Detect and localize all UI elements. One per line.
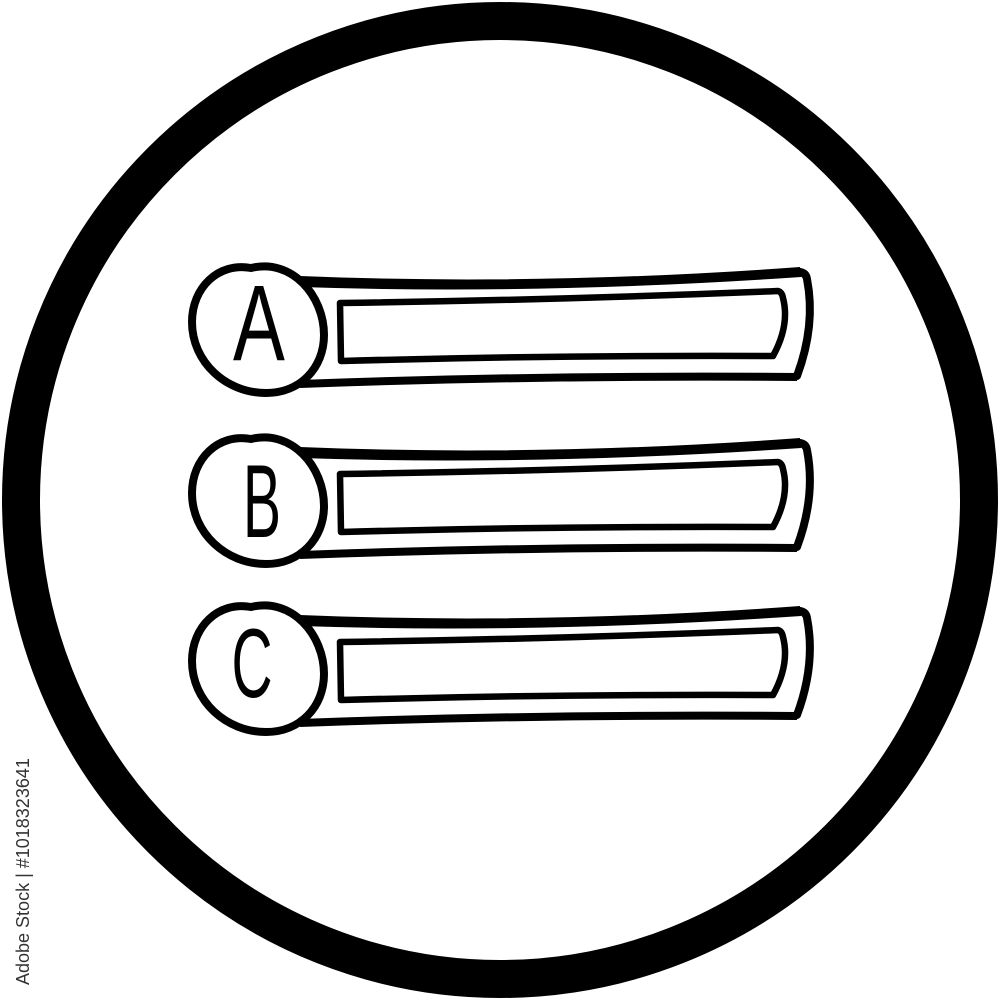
stock credit: Adobe Stock | #1018323641 — [13, 758, 33, 985]
letter C: C — [231, 608, 273, 718]
row C — [192, 605, 810, 732]
row B — [192, 437, 810, 564]
letter A: A — [233, 262, 285, 383]
row A — [192, 262, 810, 393]
letter B: B — [243, 443, 281, 559]
